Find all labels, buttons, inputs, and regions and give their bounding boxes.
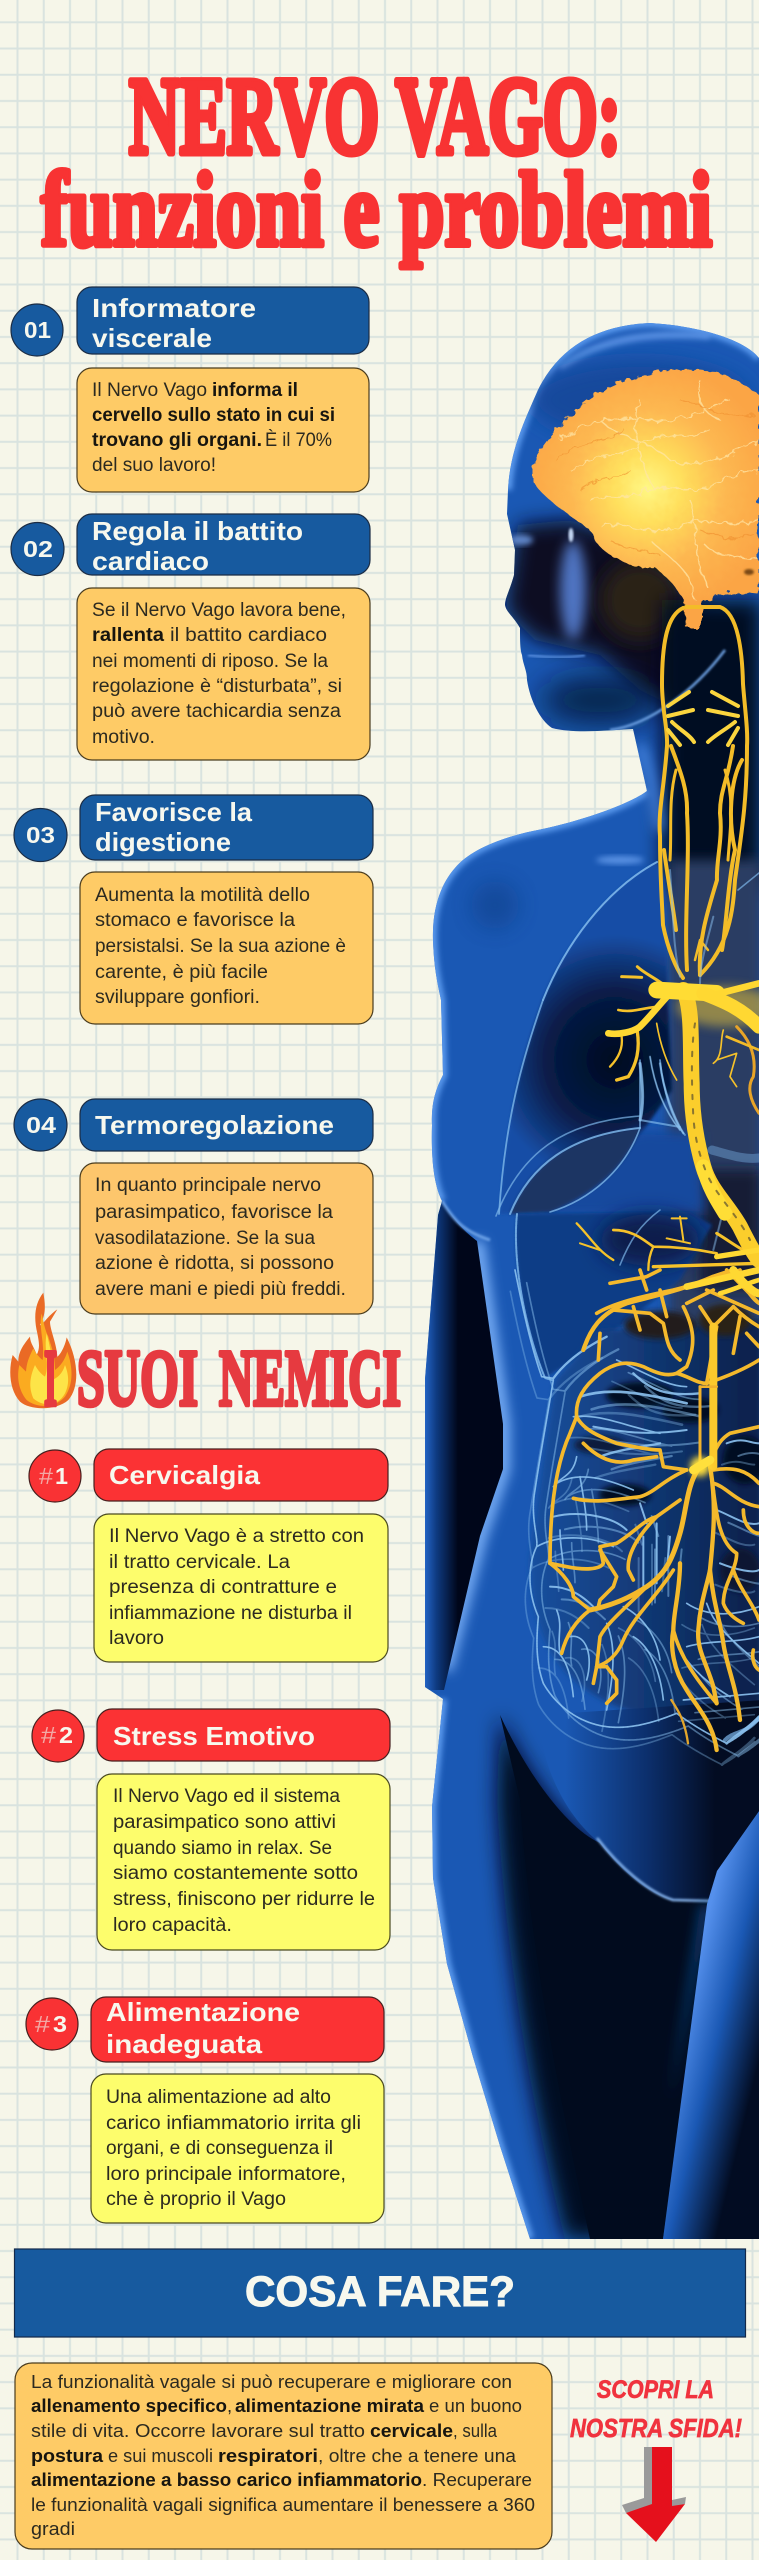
- badge #3: #: [35, 2011, 50, 2037]
- text block: cosa fare: le funzionalità vagali significa aumentare il benessere a 360: [31, 2494, 535, 2515]
- text block 03: sviluppare gonfiori.: [95, 987, 260, 1008]
- head shading: [505, 520, 700, 720]
- heading: cervicalgia: Cervicalgia: [109, 1460, 261, 1490]
- number badge 04: [14, 1099, 67, 1151]
- text block #2: quando siamo in relax. Se: [113, 1838, 332, 1859]
- panel: #1 cervicalgia: [29, 1449, 388, 1662]
- heading: regola il battito cardiaco: Regola il battito: [92, 516, 303, 546]
- icon: brain: [533, 369, 759, 628]
- heading: stress emotivo: Stress Emotivo: [113, 1721, 315, 1751]
- badge #3: [26, 1998, 78, 2050]
- heading: termoregolazione: [80, 1099, 373, 1151]
- text block: cosa fare: postura: [31, 2445, 104, 2466]
- text block 04: azione è ridotta, si possono: [95, 1253, 334, 1274]
- text block #3: loro principale informatore,: [106, 2164, 346, 2185]
- text block 01: informa il: [212, 380, 298, 401]
- text block 04: [80, 1163, 373, 1314]
- figure: blue female body with vagus nerve: [420, 310, 759, 2250]
- call to action: scopri la nostra sfida: SCOPRI LA: [597, 2376, 714, 2404]
- text block 02: motivo.: [92, 727, 155, 748]
- text block #1: Il Nervo Vago è a stretto con: [109, 1526, 364, 1547]
- heading: regola il battito cardiaco: cardiaco: [92, 546, 209, 576]
- text block #1: [94, 1514, 388, 1662]
- text block: cosa fare: stile di vita. Occorre lavorare sul tratto: [31, 2420, 365, 2441]
- text block #1: lavoro: [109, 1628, 164, 1649]
- number badge 02: 02: [23, 536, 53, 562]
- text block #2: [97, 1774, 390, 1950]
- heading: favorisce la digestione: Favorisce la: [95, 797, 253, 827]
- banner: cosa fare: COSA FARE?: [245, 2268, 515, 2316]
- torso rim and arm: [445, 1241, 503, 1670]
- heading: i suoi nemici: NEMICI: [219, 1335, 401, 1423]
- number badge 04: 04: [26, 1112, 56, 1138]
- vagus nerve: neck loop: [660, 607, 747, 978]
- text block #1: presenza di contratture e: [109, 1577, 337, 1598]
- text block: cosa fare: La funzionalità vagale si può recuperare e migliorare con: [31, 2371, 512, 2392]
- text block #2: loro capacità.: [113, 1915, 232, 1936]
- text block: cosa fare: . Recuperare: [422, 2469, 532, 2490]
- text block 04: vasodilatazione. Se la sua: [95, 1228, 315, 1249]
- text block 03: Aumenta la motilità dello: [95, 885, 310, 906]
- text block: cosa fare: cervicale: [370, 2420, 453, 2441]
- number badge 02: [11, 522, 64, 576]
- chest shading: [668, 860, 759, 1340]
- text block #3: che è proprio il Vago: [106, 2189, 286, 2210]
- panel: #2 stress emotivo: [32, 1709, 390, 1950]
- heading: stress emotivo: [97, 1709, 390, 1761]
- text block 02: rallenta: [92, 625, 164, 646]
- panel: 02 regola il battito cardiaco: [11, 514, 370, 760]
- text block #2: siamo costantemente sotto: [113, 1863, 358, 1884]
- text block 02: nei momenti di riposo. Se la: [92, 651, 328, 672]
- text block 01: È il 70%: [265, 430, 332, 451]
- number badge 03: [14, 808, 67, 862]
- text block: cosa fare: gradi: [31, 2518, 75, 2539]
- number badge 03: 03: [26, 822, 55, 848]
- text block 01: cervello sullo stato in cui si: [92, 405, 335, 426]
- text block 02: regolazione è “disturbata”, si: [92, 676, 342, 697]
- text block 03: carente, è più facile: [95, 962, 268, 983]
- text block #3: carico infiammatorio irrita gli: [106, 2113, 361, 2134]
- call to action: scopri la nostra sfida: [570, 2376, 742, 2443]
- text block 02: [77, 588, 370, 760]
- text block: cosa fare: alimentazione a basso carico infiammatorio: [31, 2469, 422, 2490]
- text block: cosa fare: e un buono: [429, 2395, 522, 2416]
- banner: cosa fare: [14, 2249, 746, 2337]
- text block: cosa fare: alimentazione mirata: [235, 2395, 425, 2416]
- text block #1: il tratto cervicale. La: [109, 1552, 290, 1573]
- text block: cosa fare: respiratori: [218, 2445, 318, 2466]
- icon: flame: [10, 1293, 76, 1408]
- text block 03: [80, 872, 373, 1024]
- pale blue lung and organ lines: [496, 862, 759, 1740]
- panel: 04 termoregolazione: [14, 1099, 373, 1314]
- heading: informatore viscerale: [77, 287, 369, 354]
- text block 01: Il Nervo Vago: [92, 380, 207, 401]
- badge #2: #: [41, 1722, 56, 1748]
- badge #1: 1: [55, 1463, 68, 1489]
- text block #3: Una alimentazione ad alto: [106, 2087, 331, 2108]
- panel: 03 favorisce la digestione: [14, 795, 373, 1024]
- heading: i suoi nemici: I: [44, 1335, 57, 1423]
- text block 01: del suo lavoro!: [92, 455, 216, 476]
- vagus nerve: chest branches: [577, 870, 759, 1270]
- text block 04: parasimpatico, favorisce la: [95, 1202, 333, 1223]
- heading: i suoi nemici: SUOI: [77, 1335, 198, 1423]
- text block 01: [77, 368, 369, 492]
- badge #1: [29, 1450, 81, 1502]
- text block #2: parasimpatico sono attivi: [113, 1812, 336, 1833]
- text block #3: organi, e di conseguenza il: [106, 2138, 333, 2159]
- text block #2: Il Nervo Vago ed il sistema: [113, 1786, 340, 1807]
- heading: alimentazione inadeguata: inadeguata: [106, 2029, 263, 2059]
- badge #2: 2: [59, 1722, 73, 1748]
- text block #3: [91, 2074, 384, 2223]
- text block 03: persistalsi. Se la sua azione è: [95, 936, 346, 957]
- text block: cosa fare: , oltre che a tenere una: [318, 2445, 517, 2466]
- badge #1: #: [39, 1463, 53, 1489]
- heading: regola il battito cardiaco: [77, 514, 370, 576]
- heading: favorisce la digestione: digestione: [95, 827, 231, 857]
- heading: i suoi nemici: [44, 1335, 401, 1423]
- heading: favorisce la digestione: [80, 795, 373, 860]
- text block: cosa fare: allenamento specifico: [31, 2395, 227, 2416]
- number badge 01: 01: [24, 317, 51, 343]
- number badge 01: [11, 304, 63, 356]
- text block: cosa fare: e sui muscoli: [108, 2445, 213, 2466]
- heading: informatore viscerale: viscerale: [92, 323, 212, 353]
- vagus nerve: abdominal branches: [510, 1270, 759, 1765]
- text block 02: può avere tachicardia senza: [92, 701, 341, 722]
- text block: cosa fare: [15, 2363, 552, 2549]
- heading: termoregolazione: Termoregolazione: [95, 1110, 334, 1140]
- thigh and pelvis: [482, 1712, 664, 2239]
- badge #2: [32, 1710, 84, 1762]
- text block 01: trovano gli organi.: [92, 430, 262, 451]
- text block 04: In quanto principale nervo: [95, 1175, 321, 1196]
- heading: cervicalgia: [94, 1449, 388, 1501]
- text block #2: stress, finiscono per ridurre le: [113, 1889, 375, 1910]
- arrow: down: [622, 2447, 686, 2542]
- panel: #3 alimentazione inadeguata: [26, 1997, 384, 2223]
- heading: alimentazione inadeguata: [91, 1997, 384, 2062]
- text block: cosa fare: , sulla: [453, 2420, 498, 2441]
- panel: 01 informatore viscerale: [11, 287, 369, 492]
- heading: alimentazione inadeguata: Alimentazione: [106, 1997, 300, 2027]
- abdomen shading: [530, 1320, 759, 1723]
- heading: informatore viscerale: Informatore: [92, 293, 256, 323]
- text block 04: avere mani e piedi più freddi.: [95, 1279, 346, 1300]
- text block 03: stomaco e favorisce la: [95, 910, 295, 931]
- text block 02: il battito cardiaco: [170, 625, 327, 646]
- text block #1: infiammazione ne disturba il: [109, 1603, 352, 1624]
- title: [41, 55, 712, 268]
- text block 02: Se il Nervo Vago lavora bene,: [92, 600, 346, 621]
- text block: cosa fare: ,: [227, 2395, 232, 2416]
- badge #3: 3: [53, 2011, 67, 2037]
